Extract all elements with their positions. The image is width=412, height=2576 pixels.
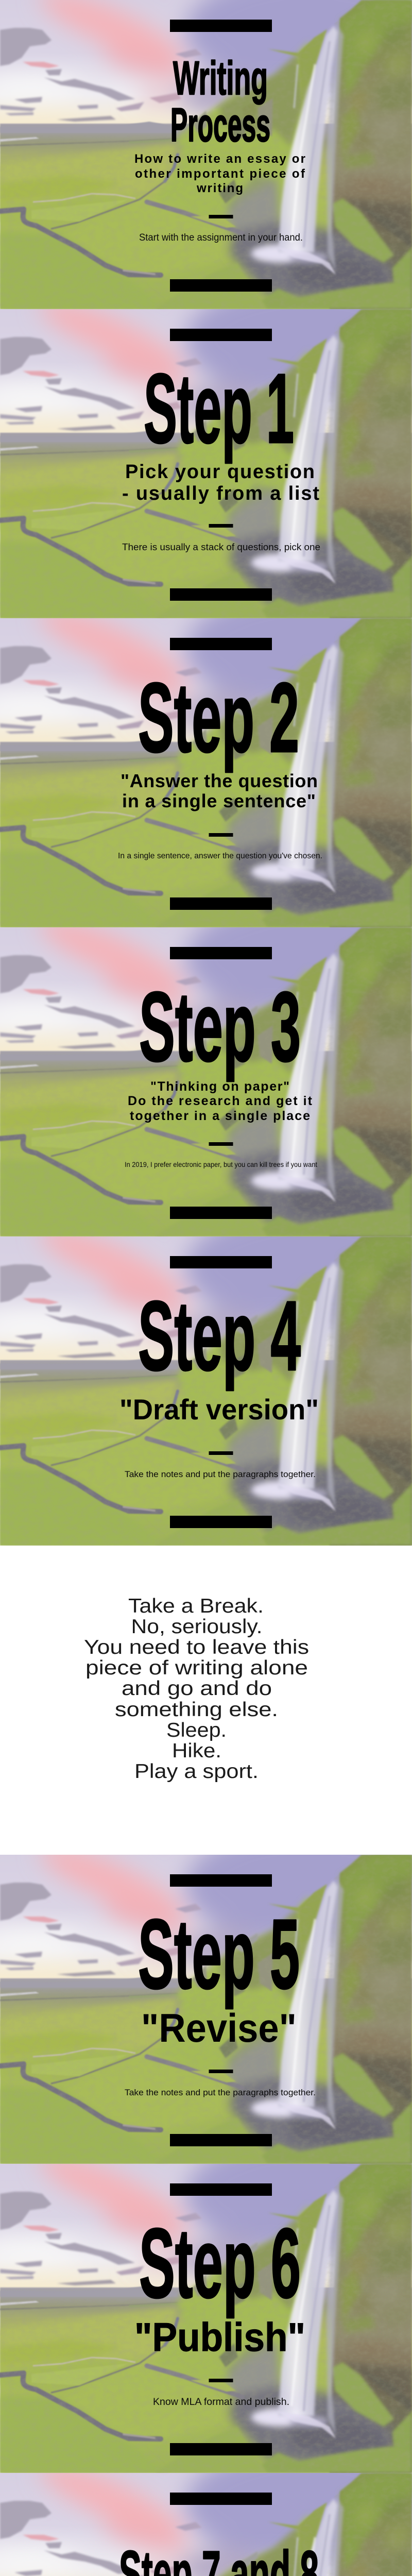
panel: step 1 xyxy=(0,309,412,618)
panel: take a break: Take a Break. xyxy=(128,1595,264,1617)
panel: title xyxy=(0,0,412,309)
panel: step 5 xyxy=(0,1855,412,2164)
step subtitle: together in a single place xyxy=(130,1109,310,1123)
note: Start with the assignment in your hand. xyxy=(139,232,303,243)
step subtitle: "Publish" xyxy=(134,2314,305,2360)
top bar xyxy=(170,638,272,650)
title xyxy=(170,52,270,151)
bottom bar xyxy=(170,279,272,292)
panel: step 4 xyxy=(0,1236,412,1546)
short divider xyxy=(209,1142,233,1146)
bottom bar xyxy=(170,2443,272,2455)
short divider xyxy=(209,2070,233,2073)
top bar xyxy=(170,329,272,341)
panel: take a break xyxy=(84,1595,309,1783)
subtitle xyxy=(134,152,305,195)
step subtitle: in a single sentence" xyxy=(122,790,316,811)
step subtitle xyxy=(128,1079,313,1123)
subtitle: other important piece of xyxy=(135,167,305,181)
short divider xyxy=(209,215,233,218)
panel: step 3 xyxy=(0,927,412,1236)
note: In 2019, I prefer electronic paper, but you can kill trees if you want xyxy=(125,1160,317,1168)
step subtitle: Pick your question xyxy=(125,461,315,483)
step subtitle: "Answer the question xyxy=(121,770,318,791)
panel: take a break: Hike. xyxy=(172,1740,221,1762)
bottom bar xyxy=(170,1207,272,1219)
top bar xyxy=(170,1256,272,1268)
step subtitle xyxy=(122,461,319,504)
step subtitle: "Draft version" xyxy=(119,1393,319,1426)
photo background xyxy=(0,899,412,1236)
short divider xyxy=(209,2379,233,2382)
short divider xyxy=(209,524,233,528)
panel: take a break: No, seriously. xyxy=(131,1616,263,1638)
top bar xyxy=(170,947,272,959)
panel: take a break: piece of writing alone xyxy=(85,1657,308,1679)
panel: take a break: You need to leave this xyxy=(84,1636,309,1658)
photo background xyxy=(0,0,412,309)
top bar xyxy=(170,1874,272,1887)
photo background xyxy=(0,590,412,927)
photo background xyxy=(0,2136,412,2473)
photo background xyxy=(0,2445,412,2576)
panel: steps 7 and 8 xyxy=(0,2473,412,2576)
step subtitle xyxy=(121,770,318,811)
panel: take a break: something else. xyxy=(115,1699,278,1721)
subtitle: How to write an essay or xyxy=(134,152,305,166)
top bar xyxy=(170,2493,272,2505)
short divider xyxy=(209,1451,233,1455)
note: Know MLA format and publish. xyxy=(153,2397,289,2408)
note: In a single sentence, answer the question you've chosen. xyxy=(118,852,322,860)
bottom bar xyxy=(170,588,272,601)
panel: take a break: Sleep. xyxy=(166,1719,227,1741)
panel: take a break: and go and do xyxy=(122,1677,272,1700)
photo background xyxy=(0,281,412,618)
step subtitle: "Thinking on paper" xyxy=(150,1079,289,1094)
title: Process xyxy=(170,99,270,151)
top bar xyxy=(170,20,272,32)
top bar xyxy=(170,2183,272,2196)
step subtitle: - usually from a list xyxy=(122,483,319,504)
step subtitle: Do the research and get it xyxy=(128,1094,313,1108)
photo background xyxy=(0,1826,412,2164)
bottom bar xyxy=(170,897,272,910)
panel: take a break: Play a sport. xyxy=(134,1760,259,1783)
step subtitle: "Revise" xyxy=(141,2005,297,2050)
photo background xyxy=(0,1208,412,1546)
title: Writing xyxy=(173,52,268,105)
panel: step 2 xyxy=(0,618,412,927)
panel: step 6 xyxy=(0,2164,412,2473)
bottom bar xyxy=(170,1516,272,1528)
note: Take the notes and put the paragraphs together. xyxy=(125,2088,316,2097)
short divider xyxy=(209,833,233,837)
bottom bar xyxy=(170,2134,272,2146)
note: There is usually a stack of questions, pick one xyxy=(122,542,320,552)
note: Take the notes and put the paragraphs together. xyxy=(125,1469,316,1479)
subtitle: writing xyxy=(196,181,243,195)
